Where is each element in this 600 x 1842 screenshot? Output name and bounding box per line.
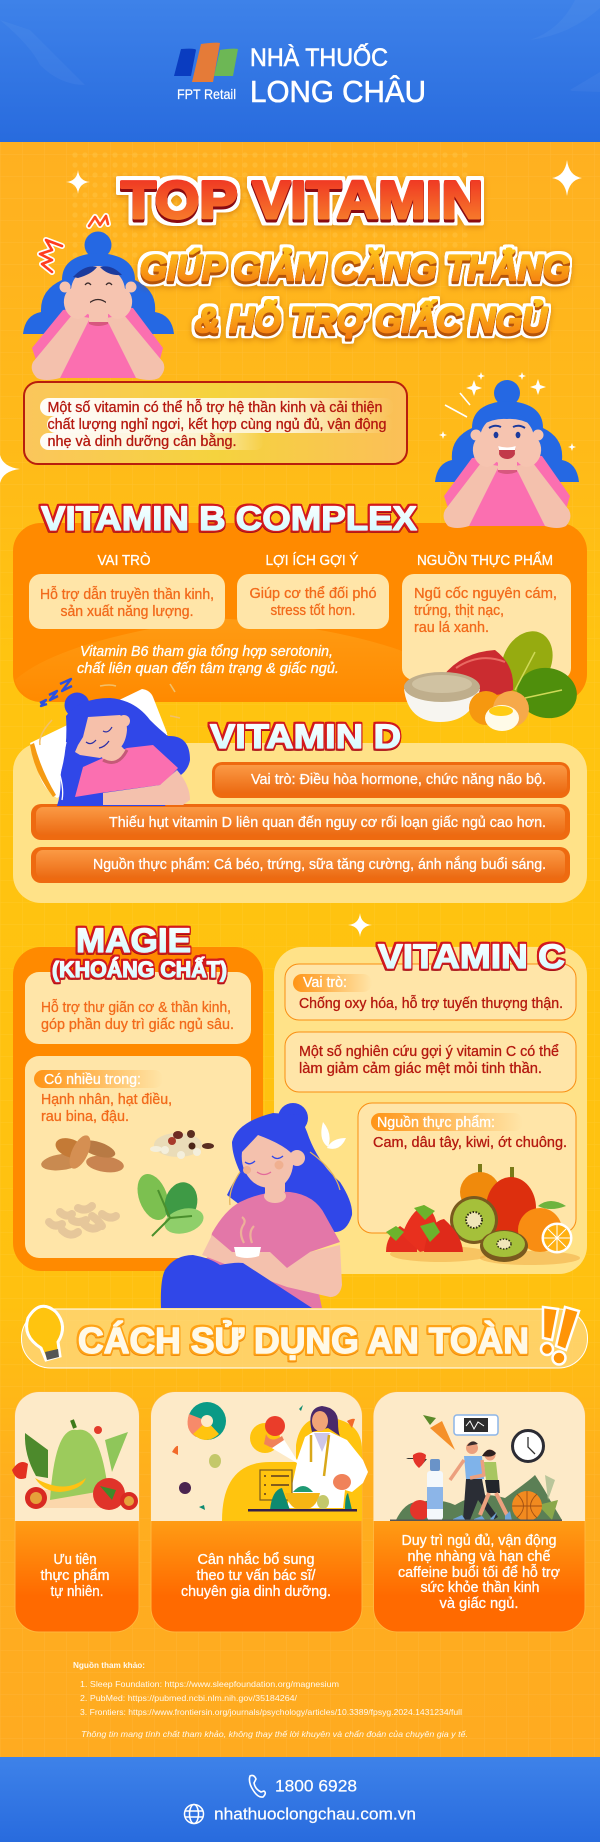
role box <box>29 574 225 629</box>
heading: VITAMIN D <box>210 718 401 756</box>
box: sources: Cam, dâu tây, kiwi, ớt chuông. <box>373 1135 567 1151</box>
zzz <box>40 679 72 706</box>
vitamin B6 note: Vitamin B6 tham gia tổng hợp serotonin, <box>80 643 333 660</box>
almonds <box>40 1132 125 1175</box>
phone number: 1800 6928 <box>275 1776 357 1796</box>
heading: VITAMIN B COMPLEX <box>41 500 417 538</box>
heading: VITAMIN C <box>378 938 565 976</box>
intro callout: Một số vitamin có thể hỗ trợ hệ thần kinh và cải thiện <box>48 399 382 416</box>
role box: Hỗ trợ dẫn truyền thần kinh, <box>40 586 214 603</box>
references: 2. PubMed: https://pubmed.ncbi.nlm.nih.gov/35184264/ <box>80 1693 298 1703</box>
sparkles <box>439 372 576 451</box>
benefit box: stress tốt hơn. <box>270 603 356 619</box>
illustration: walking couple <box>390 1415 562 1522</box>
references: 1. Sleep Foundation: https://www.sleepfoundation.org/magnesium <box>80 1679 339 1689</box>
icon: phone <box>249 1775 265 1797</box>
text: caffeine buổi tối để hỗ trợ <box>398 1564 560 1581</box>
references: Thông tin mang tính chất tham khảo, không thay thế lời khuyên và chẩn đoán của chuyên gia y tế. <box>81 1729 468 1739</box>
intro callout: chất lượng nghỉ ngơi, kết hợp cùng ngủ đủ, vận động <box>48 417 386 433</box>
box: sources: Nguồn thực phẩm: <box>377 1115 495 1131</box>
box: sources <box>25 1056 251 1258</box>
bar: deficiency: Thiếu hụt vitamin D liên quan đến nguy cơ rối loạn giấc ngủ cao hơn. <box>109 814 546 831</box>
box: sources: rau bina, đậu. <box>41 1109 129 1125</box>
text <box>181 1551 331 1600</box>
woman happy <box>435 372 579 528</box>
text <box>398 1532 560 1612</box>
panel: vitamin D <box>13 718 587 903</box>
text: và giấc ngủ. <box>440 1595 518 1612</box>
header band <box>0 0 600 142</box>
vitamin B6 note: chất liên quan đến tâm trạng & giấc ngủ. <box>77 660 339 677</box>
box: effects: góp phần duy trì giấc ngủ sâu. <box>41 1017 234 1033</box>
title: TOP VITAMIN <box>121 171 483 230</box>
footer band <box>0 1757 600 1842</box>
box: effects: Hỗ trợ thư giãn cơ & thần kinh, <box>41 999 231 1016</box>
icon: globe <box>184 1804 204 1824</box>
column headers: LỢI ÍCH GỢI Ý <box>266 552 358 569</box>
bar: role: Vai trò: Điều hòa hormone, chức năng não bộ. <box>251 771 546 788</box>
safety heading pill <box>22 1306 588 1368</box>
text: tự nhiên. <box>50 1583 104 1600</box>
heading: MAGIE <box>76 922 191 960</box>
card: natural foods <box>12 1392 139 1632</box>
icon: light bulb <box>27 1306 63 1360</box>
box: sources: Có nhiều trong: <box>44 1072 141 1088</box>
column headers: NGUỒN THỰC PHẨM <box>417 551 553 569</box>
heading: (KHOÁNG CHẤT) <box>52 957 227 982</box>
text: sức khỏe thần kinh <box>420 1579 540 1596</box>
panel: magie <box>13 922 263 1271</box>
panel: vitamin B complex <box>13 500 587 702</box>
title: & HỖ TRỢ GIẤC NGỦ <box>195 300 548 340</box>
box: sources <box>358 1103 576 1233</box>
bar: sources: Nguồn thực phẩm: Cá béo, trứng, sữa tăng cường, ánh nắng buổi sáng. <box>93 856 546 873</box>
column headers: VAI TRÒ <box>98 552 150 569</box>
text: nhẹ nhàng và hạn chế <box>408 1548 551 1565</box>
text: theo tư vấn bác sĩ/ <box>196 1567 316 1584</box>
woman worried <box>23 216 174 380</box>
food source box <box>402 574 571 680</box>
logo: FPT Retail: FPT Retail <box>177 86 236 102</box>
box: role: Chống oxy hóa, hỗ trợ tuyến thượng thận. <box>299 995 563 1012</box>
food source box: rau lá xanh. <box>414 620 489 636</box>
text: Cân nhắc bổ sung <box>198 1551 314 1568</box>
cashews <box>49 1206 116 1235</box>
food source box: Ngũ cốc nguyên cám, <box>414 586 557 602</box>
woman sleeping <box>30 679 190 806</box>
logo wordmark: LONG CHÂU <box>250 74 426 109</box>
woman with tea <box>161 1103 352 1308</box>
card: lifestyle <box>374 1392 585 1632</box>
references: Nguồn tham khảo: <box>73 1660 145 1670</box>
bar: deficiency <box>31 804 570 840</box>
box: sources: Hạnh nhân, hạt điều, <box>41 1092 172 1108</box>
role box: sản xuất năng lượng. <box>60 604 194 620</box>
intro callout <box>24 382 407 464</box>
title: GIÚP GIẢM CĂNG THẲNG <box>140 248 570 288</box>
text: Duy trì ngủ đủ, vận động <box>402 1532 556 1549</box>
box: research: làm giảm cảm giác mệt mỏi tinh thần. <box>299 1061 542 1077</box>
box: role <box>285 964 576 1020</box>
intro callout: nhẹ và dinh dưỡng cân bằng. <box>48 433 236 450</box>
illustration: nutritionist <box>172 1402 368 1521</box>
decorative stars <box>0 160 582 937</box>
heading <box>52 922 227 982</box>
box: role: Vai trò: <box>303 975 347 991</box>
benefit box: Giúp cơ thể đối phó <box>250 586 376 602</box>
text: thực phẩm <box>40 1567 110 1584</box>
vitamin B6 note <box>77 643 339 677</box>
card: consult expert <box>151 1392 368 1632</box>
box: research: Một số nghiên cứu gợi ý vitamin C có thể <box>299 1044 559 1060</box>
benefit box <box>237 574 389 629</box>
text: chuyên gia dinh dưỡng. <box>181 1583 331 1600</box>
box: research <box>285 1032 576 1092</box>
heading: CÁCH SỬ DỤNG AN TOÀN <box>78 1319 529 1361</box>
box: effects <box>25 972 251 1044</box>
illustration: vegetables <box>12 1420 138 1510</box>
icon: exclamation marks <box>541 1307 579 1364</box>
food group: B complex <box>404 623 581 731</box>
food source box: trứng, thịt nạc, <box>414 603 504 619</box>
logo wordmark: NHÀ THUỐC <box>250 42 388 72</box>
fruits <box>386 1164 580 1265</box>
bar: sources <box>31 847 570 883</box>
title <box>121 171 570 340</box>
stress marks <box>40 216 108 272</box>
column headers <box>98 551 553 569</box>
logo: FPT Retail <box>174 43 238 102</box>
references: 3. Frontiers: https://www.frontiersin.org/journals/psychology/articles/10.3389/fpsyg.2024.1431234/full <box>80 1707 462 1717</box>
references <box>73 1660 468 1739</box>
bar: role <box>212 762 570 798</box>
logo wordmark <box>250 42 426 109</box>
text: Ưu tiên <box>54 1551 96 1568</box>
text <box>40 1551 110 1600</box>
panel: vitamin C <box>274 938 587 1274</box>
mixed nuts <box>150 1130 214 1159</box>
spinach <box>132 1170 206 1238</box>
website: nhathuoclongchau.com.vn <box>214 1804 416 1824</box>
